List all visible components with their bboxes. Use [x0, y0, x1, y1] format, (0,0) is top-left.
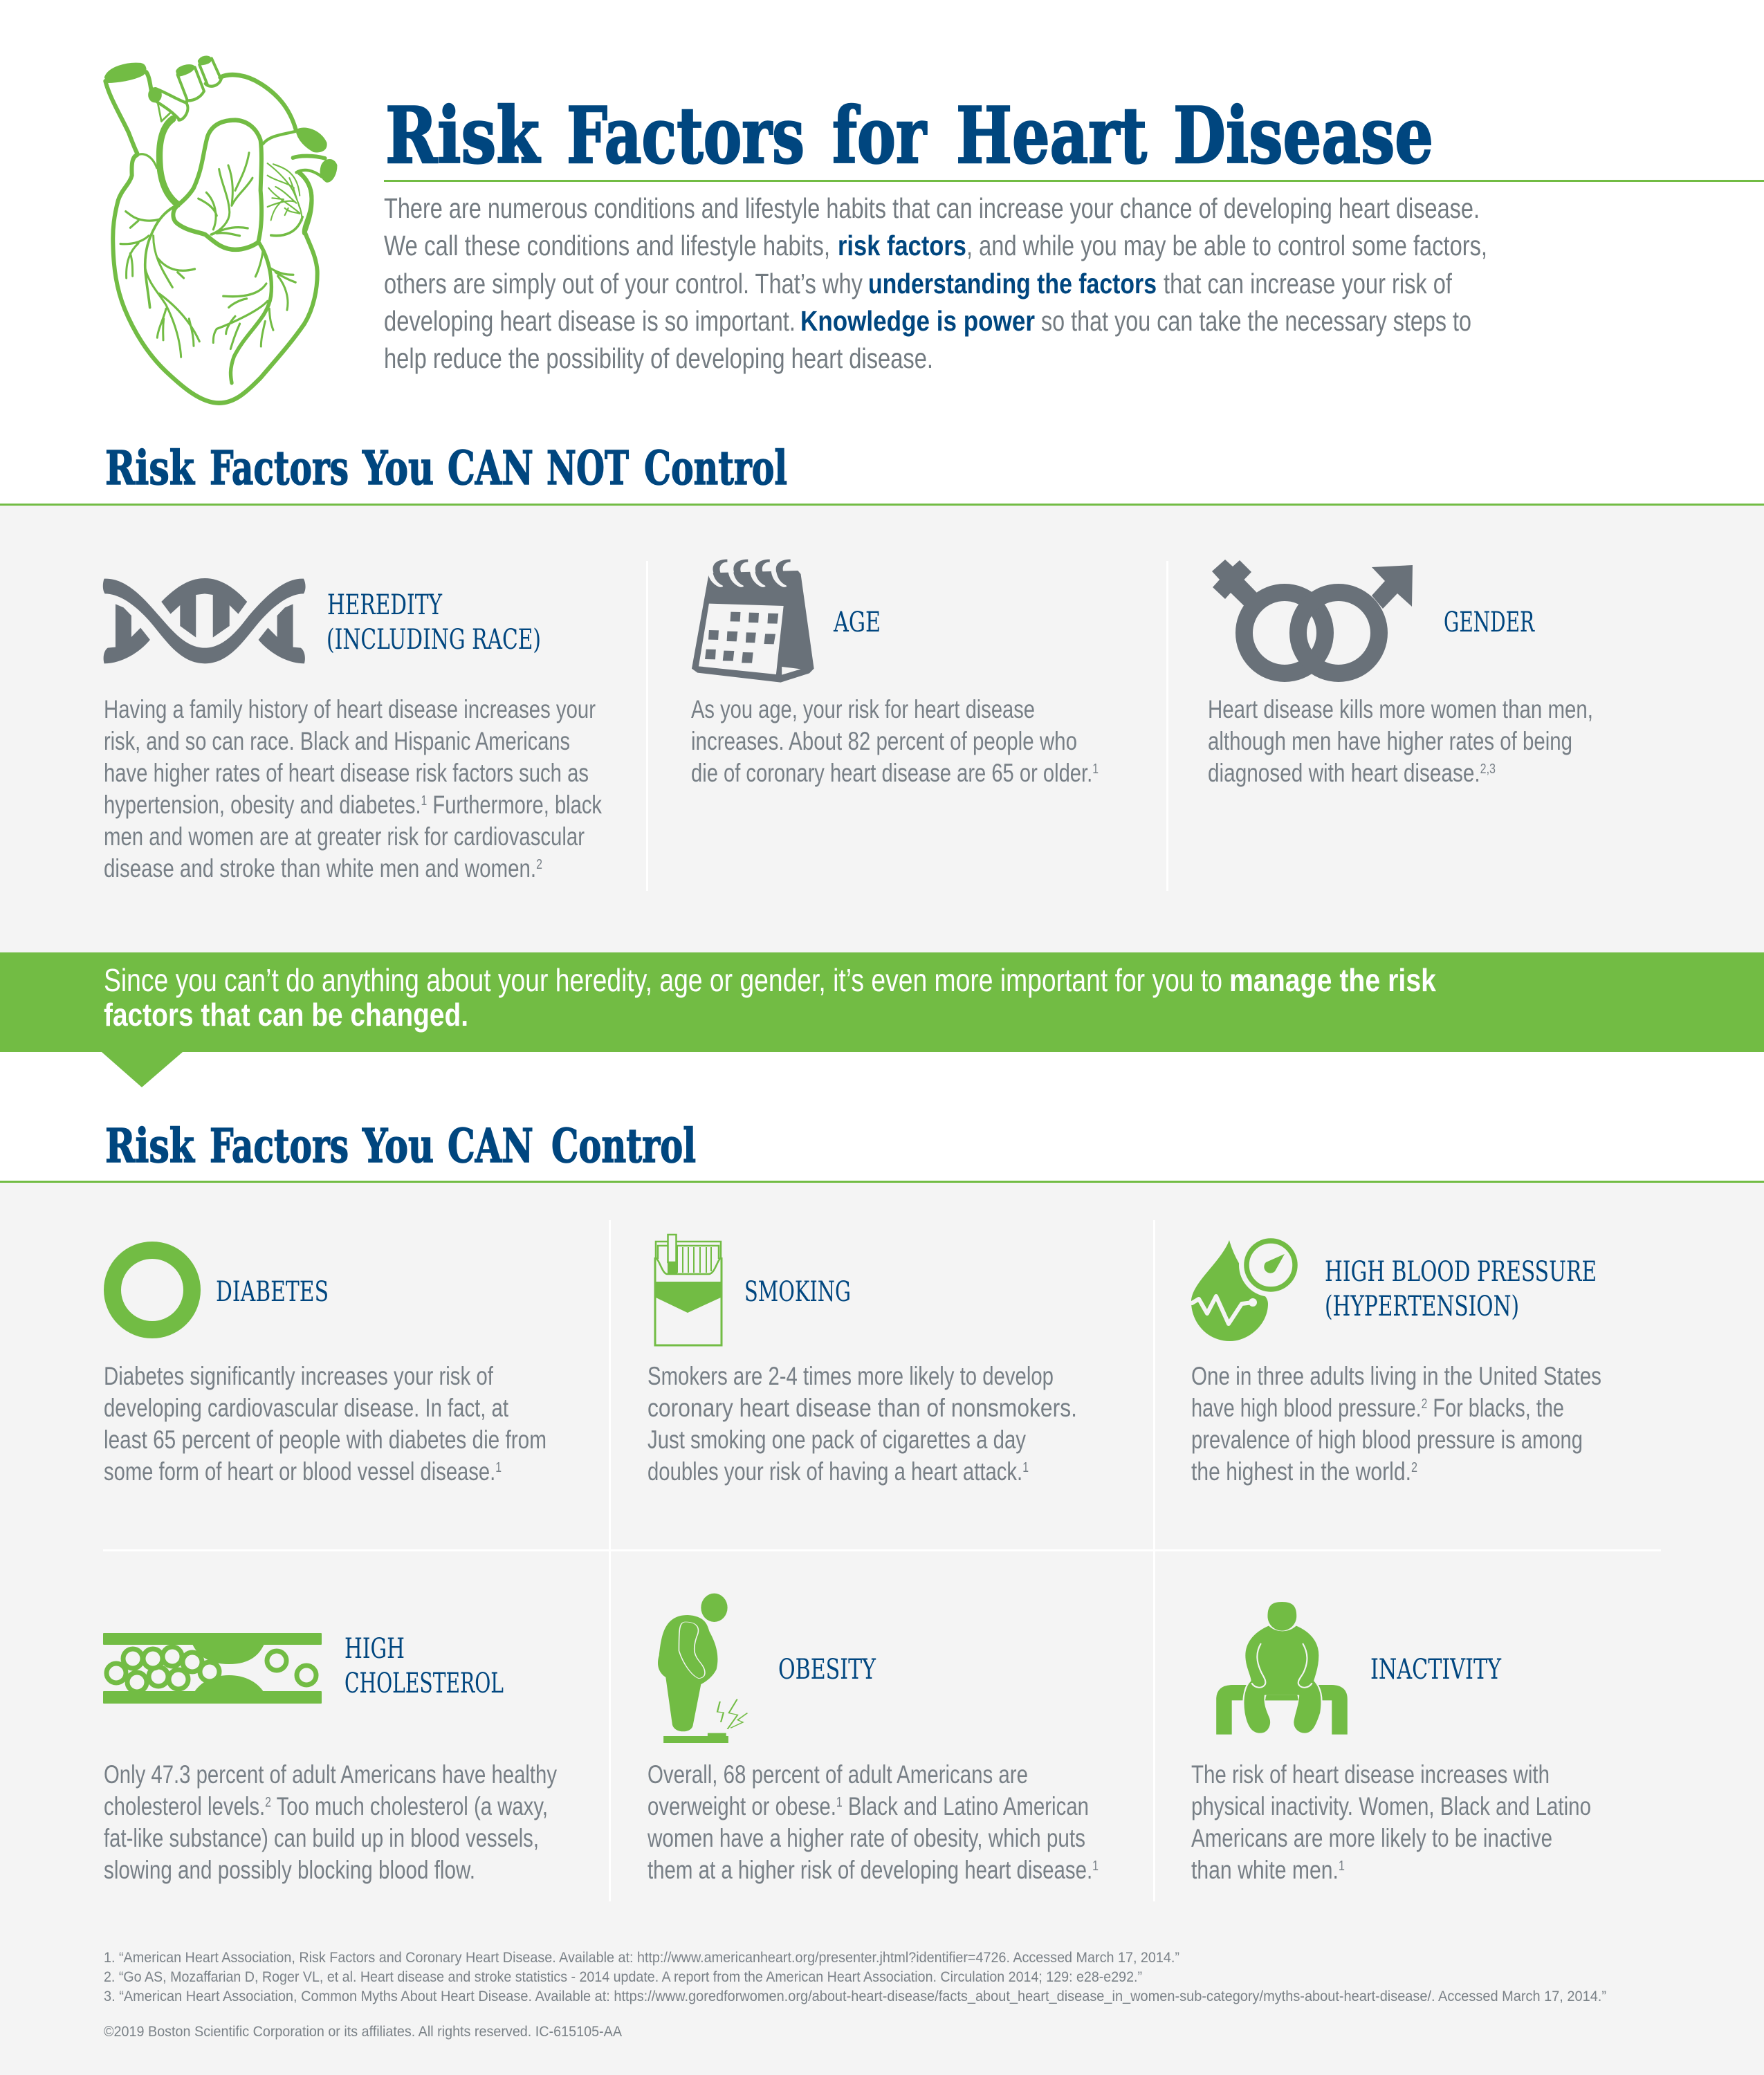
icon: anatomical heart — [105, 56, 337, 403]
text: high blood pressure — [1191, 1362, 1601, 1486]
intro paragraph: risk factors — [838, 230, 966, 261]
text: heredity: disease and stroke than white men and women. — [104, 854, 646, 883]
text: high blood pressure: 2 — [1422, 1396, 1427, 1412]
intro paragraph: understanding the factors — [868, 268, 1157, 299]
intro paragraph: so that you can take the necessary steps to — [1041, 305, 1471, 337]
title: for — [832, 91, 927, 181]
heading: can control: Risk — [105, 1118, 195, 1173]
heading: high cholesterol — [344, 1633, 504, 1699]
heading: cannot control: Factors — [210, 441, 349, 495]
text: obesity: overweight or obese. — [647, 1792, 885, 1820]
text: age: As you age, your risk for heart disease — [691, 695, 1035, 723]
text: inactivity: 1 — [1339, 1859, 1345, 1874]
heading: can control: CAN — [448, 1118, 533, 1173]
text: diabetes: 1 — [495, 1460, 502, 1475]
intro paragraph: that can increase your risk of — [1164, 268, 1452, 299]
text: inactivity: The risk of heart disease increases with — [1191, 1760, 1550, 1789]
text: smoking: 1 — [1022, 1460, 1029, 1475]
heading: can control: You — [362, 1118, 434, 1173]
text: high blood pressure: the highest in the world. — [1191, 1457, 1462, 1486]
heading: diabetes: DIABETES — [216, 1276, 329, 1308]
copyright: ©2019 Boston Scientific Corporation or its affiliates. All rights reserved. IC-615105-AA — [104, 2024, 622, 2040]
title: Heart — [956, 91, 1147, 181]
text: inactivity — [1191, 1760, 1591, 1884]
footnotes: 3. “American Heart Association, Common Myths About Heart Disease. Available at: https://www.goredforwomen.org/about-heart-disease/facts_about_heart_disease_in_women-sub-category/myths-about-heart-disease/. Accessed March 17, 2014.” — [104, 1989, 1606, 2004]
footnotes — [104, 1950, 1606, 2004]
text: smoking: Smokers are 2-4 times more likely to develop — [647, 1362, 1054, 1390]
text: diabetes: least 65 percent of people with diabetes die from — [104, 1426, 546, 1454]
text: high blood pressure: have high blood pressure. — [1191, 1394, 1486, 1422]
intro paragraph: help reduce the possibility of developing heart disease. — [384, 342, 933, 374]
text: obesity: women have a higher rate of obesity, which puts — [647, 1824, 1085, 1852]
text: diabetes: developing cardiovascular disease. In fact, at — [104, 1394, 509, 1422]
text: high cholesterol: Too much cholesterol (a waxy, — [271, 1792, 548, 1820]
intro paragraph: Knowledge is power — [800, 305, 1035, 337]
text: obesity: 1 — [836, 1795, 843, 1810]
text: smoking: coronary heart disease than of nonsmokers. — [647, 1394, 1077, 1422]
text: high cholesterol: fat-like substance) can build up in blood vessels, — [104, 1824, 539, 1852]
text: obesity — [647, 1760, 1099, 1884]
callout banner — [0, 952, 1764, 1087]
intro paragraph — [384, 192, 1487, 374]
text: gender: 2,3 — [1480, 762, 1496, 777]
text: age — [691, 695, 1099, 787]
text: high blood pressure: 2 — [1411, 1460, 1417, 1475]
icon: calendar — [692, 561, 814, 683]
text: smoking — [647, 1362, 1077, 1486]
callout banner: Since you can’t do anything about your heredity, age or gender, it’s even more important for you to — [104, 962, 1222, 998]
icon: cigarette pack — [654, 1235, 722, 1345]
text: high cholesterol: slowing and possibly blocking blood flow. — [104, 1856, 475, 1884]
intro paragraph: developing heart disease is so important. — [384, 305, 796, 337]
text: obesity: Black and Latino American — [843, 1792, 1089, 1820]
text: obesity: 1 — [1092, 1859, 1099, 1874]
heading: high blood pressure: HIGH BLOOD PRESSURE — [1325, 1256, 1597, 1288]
intro paragraph: others are simply out of your control. That’s why — [384, 268, 863, 299]
icon: person on scale — [658, 1594, 747, 1743]
title — [385, 91, 1433, 181]
text: obesity: Overall, 68 percent of adult Americans are — [647, 1760, 1028, 1789]
heading: can control — [105, 1118, 696, 1173]
text: age: die of coronary heart disease are 65 or older. — [691, 759, 1200, 787]
footnotes: 2. “Go AS, Mozaffarian D, Roger VL, et al. Heart disease and stroke statistics - 2014 update. A report from the American Heart Association. Circulation 2014; 129: e28-e292.” — [104, 1969, 1142, 1985]
text: high cholesterol: cholesterol levels. — [104, 1792, 307, 1820]
heading: can control: Control — [551, 1118, 696, 1173]
heading: gender: GENDER — [1444, 607, 1535, 638]
intro paragraph: , and while you may be able to control some factors, — [966, 230, 1487, 261]
text: heredity — [104, 695, 602, 883]
icon: gender symbols — [1212, 560, 1413, 674]
heading: cannot control: Risk — [105, 441, 195, 495]
text: high blood pressure: For blacks, the — [1427, 1394, 1564, 1422]
heading: high blood pressure — [1325, 1256, 1597, 1322]
text: heredity: hypertension, obesity and diabetes. — [104, 791, 506, 819]
title: Risk — [385, 91, 541, 181]
title rule — [384, 180, 1764, 182]
intro paragraph: We call these conditions and lifestyle habits, — [384, 230, 830, 261]
heading: obesity: OBESITY — [778, 1654, 876, 1686]
intro paragraph: There are numerous conditions and lifestyle habits that can increase your chance of developing heart disease. — [384, 192, 1480, 224]
text: heredity: risk, and so can race. Black and Hispanic Americans — [104, 727, 570, 755]
text: diabetes — [104, 1362, 546, 1486]
text: smoking: Just smoking one pack of cigarettes a day — [647, 1426, 1026, 1454]
icon: DNA helix — [103, 578, 306, 663]
text: heredity: men and women are at greater risk for cardiovascular — [104, 822, 585, 851]
heading: cannot control: Control — [644, 441, 787, 495]
text: high cholesterol — [104, 1760, 557, 1884]
text: high cholesterol: Only 47.3 percent of adult Americans have healthy — [104, 1760, 557, 1789]
text: heredity: Having a family history of heart disease increases your — [104, 695, 596, 723]
heading: high blood pressure: (HYPERTENSION) — [1325, 1291, 1519, 1322]
heading: heredity: (INCLUDING RACE) — [327, 624, 541, 656]
title: Disease — [1173, 91, 1433, 181]
text: high cholesterol: 2 — [265, 1795, 271, 1810]
heading: cannot control: CAN — [448, 441, 533, 495]
icon: clogged artery — [103, 1633, 322, 1704]
text: high blood pressure: prevalence of high blood pressure is among — [1191, 1426, 1583, 1454]
text: heredity: Furthermore, black — [427, 791, 602, 819]
text: obesity: them at a higher risk of developing heart disease. — [647, 1856, 1206, 1884]
text: inactivity: than white men. — [1191, 1856, 1372, 1884]
text: high blood pressure: One in three adults living in the United States — [1191, 1362, 1601, 1390]
text: gender: although men have higher rates of being — [1208, 727, 1572, 755]
heading: inactivity: INACTIVITY — [1370, 1654, 1501, 1686]
text: heredity: 2 — [536, 857, 542, 872]
text: diabetes: Diabetes significantly increases your risk of — [104, 1362, 494, 1390]
icon: diabetes ring — [112, 1251, 192, 1329]
footnotes: 1. “American Heart Association, Risk Factors and Coronary Heart Disease. Available at: http://www.americanheart.org/presenter.jhtml?identifier=4726. Accessed March 17, 2014.” — [104, 1950, 1179, 1966]
text: gender: Heart disease kills more women than men, — [1208, 695, 1593, 723]
heading: high cholesterol: CHOLESTEROL — [344, 1668, 504, 1699]
text: heredity: have higher rates of heart disease risk factors such as — [104, 759, 589, 787]
panel: factors you can control — [0, 1181, 1764, 2075]
title: Factors — [567, 91, 805, 181]
heading: cannot control: NOT — [546, 441, 629, 495]
text: age: increases. About 82 percent of people who — [691, 727, 1077, 755]
icon: seated person — [1216, 1602, 1348, 1735]
text: gender — [1208, 695, 1593, 787]
heading: cannot control — [105, 441, 787, 495]
text: inactivity: Americans are more likely to be inactive — [1191, 1824, 1552, 1852]
panel: factors you cannot control — [0, 504, 1764, 952]
text: inactivity: physical inactivity. Women, Black and Latino — [1191, 1792, 1591, 1820]
heading: cannot control: You — [362, 441, 434, 495]
text: gender: diagnosed with heart disease. — [1208, 759, 1547, 787]
text: smoking: doubles your risk of having a heart attack. — [647, 1457, 1121, 1486]
text: diabetes: some form of heart or blood vessel disease. — [104, 1457, 600, 1486]
heading: heredity: HEREDITY — [327, 589, 442, 621]
heading: can control: Factors — [210, 1118, 349, 1173]
heading: smoking: SMOKING — [744, 1276, 851, 1308]
text: heredity: 1 — [421, 793, 427, 809]
callout banner: manage the risk — [1229, 962, 1436, 998]
icon: blood drop and gauge — [1191, 1233, 1303, 1341]
heading: heredity — [327, 589, 541, 656]
heading: high cholesterol: HIGH — [344, 1633, 405, 1665]
callout banner: factors that can be changed. — [104, 997, 468, 1033]
heading: age: AGE — [833, 607, 881, 638]
text: age: 1 — [1092, 762, 1099, 777]
